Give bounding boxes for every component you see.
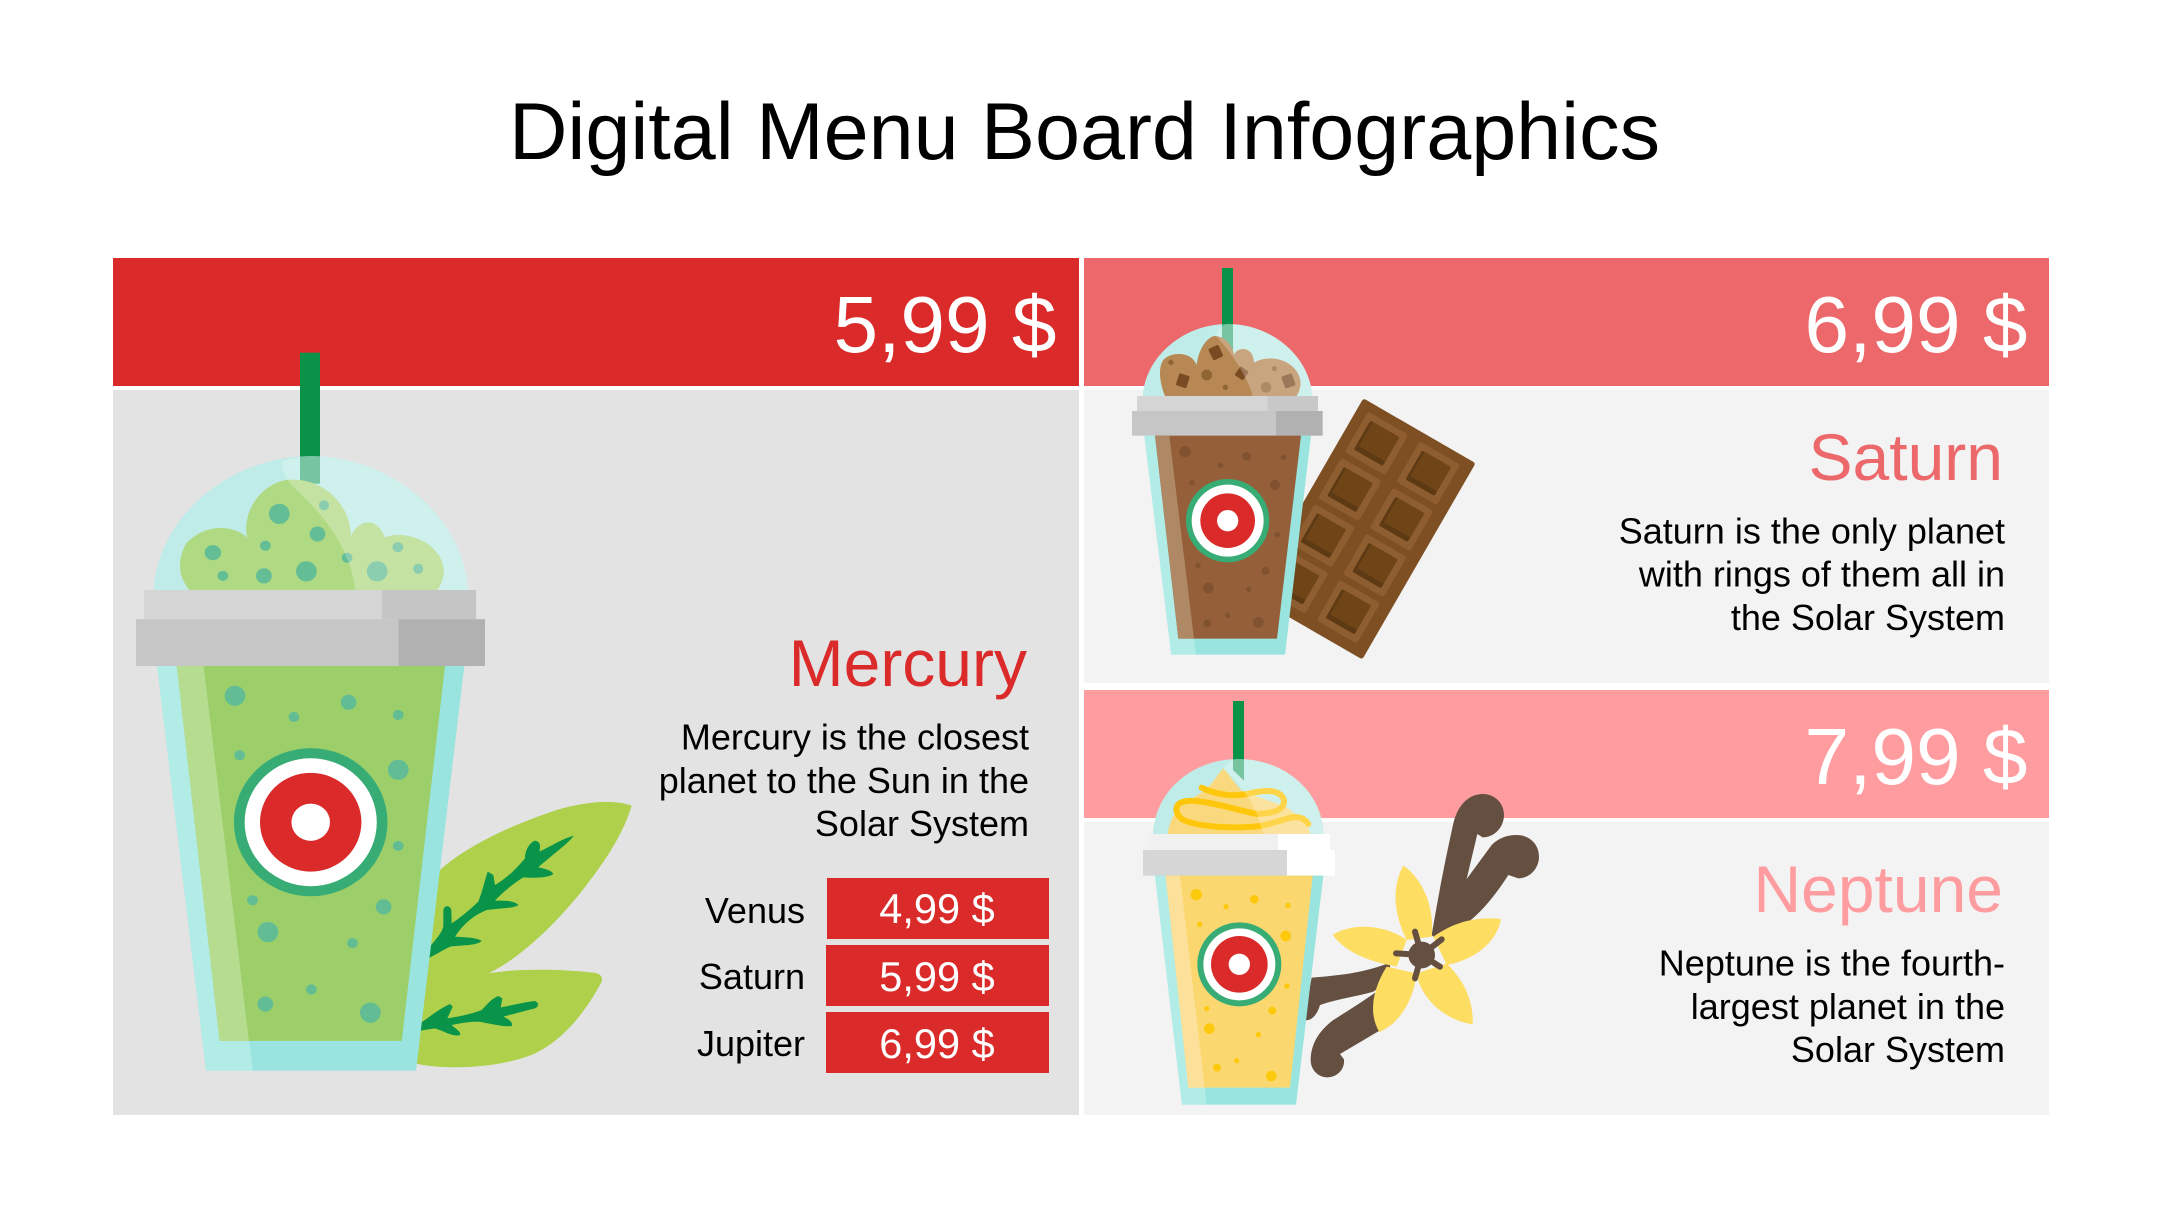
icon: chocolate bar [1250,398,1476,659]
text block: Saturn description: the Solar System [1731,597,2005,638]
icon: dome lid [1153,759,1324,834]
text block: Neptune description: Neptune is the fourth- [1659,942,2005,984]
illustration: green smoothie with leaves [136,353,632,1071]
price row: Saturn: Saturn [699,956,805,997]
text block: Mercury description: Solar System [815,803,1029,844]
icon: cup logo [1186,479,1269,562]
icon: green smoothie cup [136,353,485,1071]
icon: lid band [1143,834,1335,876]
icon: cup [157,666,464,1071]
price bar: Saturn: 6,99 $ [1805,279,2028,369]
text block: Saturn description: with rings of them all in [1638,554,2005,594]
icon: straw [300,353,320,464]
icon: foam topping [1160,324,1312,396]
text block: Mercury description: planet to the Sun in the [659,760,1029,801]
price row: Venus: 4,99 $ [879,885,995,932]
text block: Mercury description: Mercury is the closest [681,716,1029,758]
icon: lid band [1132,396,1323,436]
panel background: Neptune [1084,822,2049,1115]
text block: Saturn description: Saturn is the only planet [1619,510,2005,552]
heading: Mercury: Mercury [789,626,1027,700]
illustration: chocolate drink with bar [1132,268,1476,659]
icon: cup [1155,876,1323,1105]
price row: Jupiter [697,1012,1049,1073]
price bar: Mercury: 5,99 $ [834,279,1056,369]
title: Digital Menu Board Infographics [509,87,1660,177]
icon: lid band [136,590,485,666]
icon: dome lid [154,456,468,590]
text block: Neptune description: largest planet in the [1691,986,2005,1027]
price row: Jupiter: Jupiter [697,1023,805,1064]
panel: Mercury [113,258,1079,1115]
text block: Neptune description: Solar System [1791,1029,2005,1070]
icon: dome lid [1143,324,1312,397]
price bar: Saturn [1084,258,2049,386]
price bar: Mercury [113,258,1079,386]
price row: Venus: Venus [705,890,805,931]
price row: Jupiter: 6,99 $ [879,1020,995,1067]
icon: cup logo [234,748,387,896]
price table [697,878,1049,1073]
price row: Saturn [699,945,1049,1006]
panel background: Saturn [1084,390,2049,683]
heading: Neptune: Neptune [1753,852,2003,926]
illustration: vanilla drink with flower [1143,701,1539,1105]
price row: Venus [705,878,1049,939]
icon: cup [1144,436,1311,655]
icon: foam topping [180,456,468,590]
icon: cup logo [1197,922,1281,1006]
panel background: Mercury [113,390,1079,1115]
icon: vanilla pods and flower [1303,794,1539,1077]
icon: leaves [415,802,632,1067]
icon: straw [1233,701,1244,761]
icon: straw [1222,268,1233,328]
price bar: Neptune [1084,690,2049,818]
panel: Neptune [1084,690,2049,1115]
icon: whipped topping [1168,759,1324,834]
heading: Saturn: Saturn [1809,420,2003,494]
price bar: Neptune: 7,99 $ [1805,711,2028,801]
price row: Saturn: 5,99 $ [879,953,995,1000]
panel: Saturn [1084,258,2049,683]
